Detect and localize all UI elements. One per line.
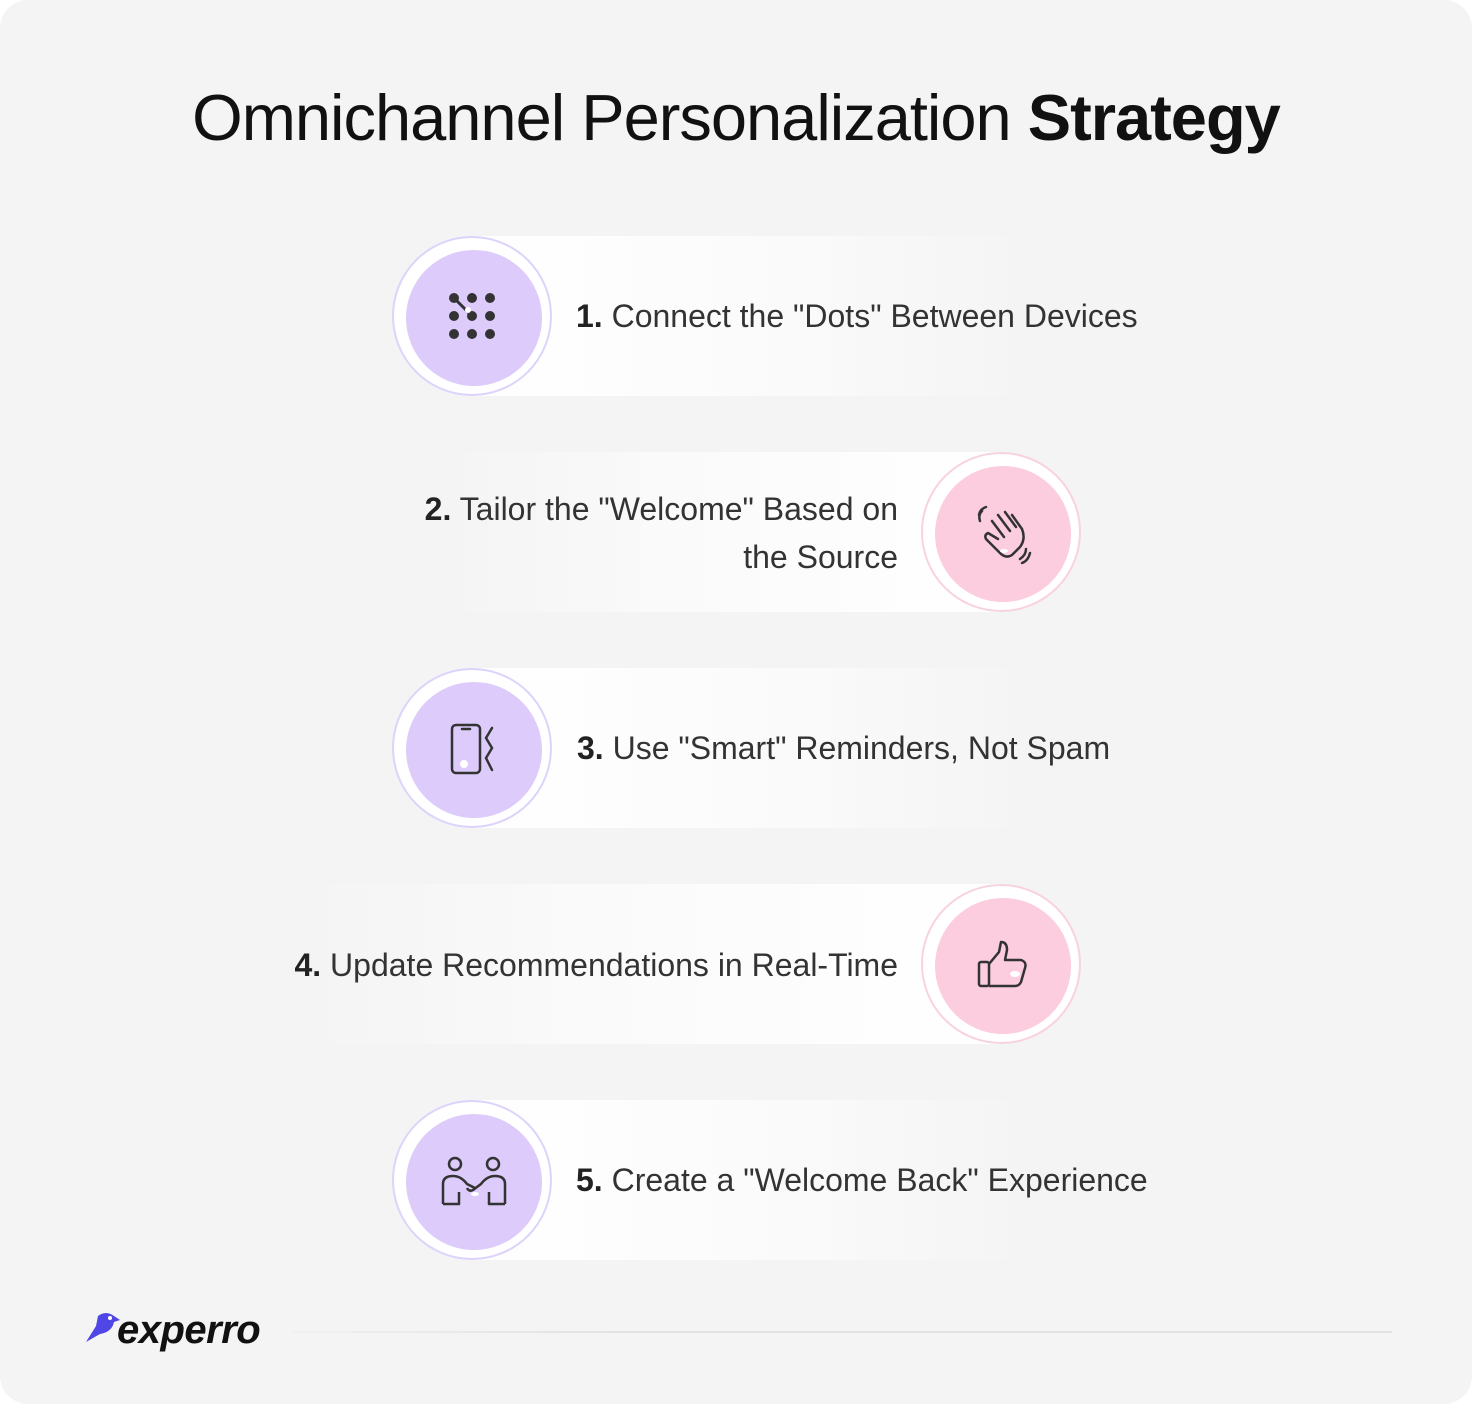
title: Omnichannel Personalization Strategy xyxy=(192,81,1280,154)
row 3 xyxy=(392,668,1110,828)
text 1: 1. Connect the "Dots" Between Devices xyxy=(576,298,1138,334)
icon: phone xyxy=(392,668,552,828)
text 2: 2. Tailor the "Welcome" Based on xyxy=(425,491,898,527)
footer line xyxy=(292,1331,1392,1333)
row 4 xyxy=(294,884,1081,1044)
row 5 xyxy=(392,1100,1148,1260)
icon: wave xyxy=(921,452,1081,612)
text 2: the Source xyxy=(743,539,898,575)
text 2 xyxy=(425,491,898,575)
row 2 xyxy=(425,452,1081,612)
icon: thumbs up xyxy=(921,884,1081,1044)
text 5: 5. Create a "Welcome Back" Experience xyxy=(576,1162,1148,1198)
icon: handshake xyxy=(392,1100,552,1260)
text 4: 4. Update Recommendations in Real-Time xyxy=(294,947,898,983)
icon: dots xyxy=(392,236,552,396)
row 1 xyxy=(392,236,1138,396)
text 3: 3. Use "Smart" Reminders, Not Spam xyxy=(577,730,1110,766)
logo: experro xyxy=(117,1308,260,1352)
